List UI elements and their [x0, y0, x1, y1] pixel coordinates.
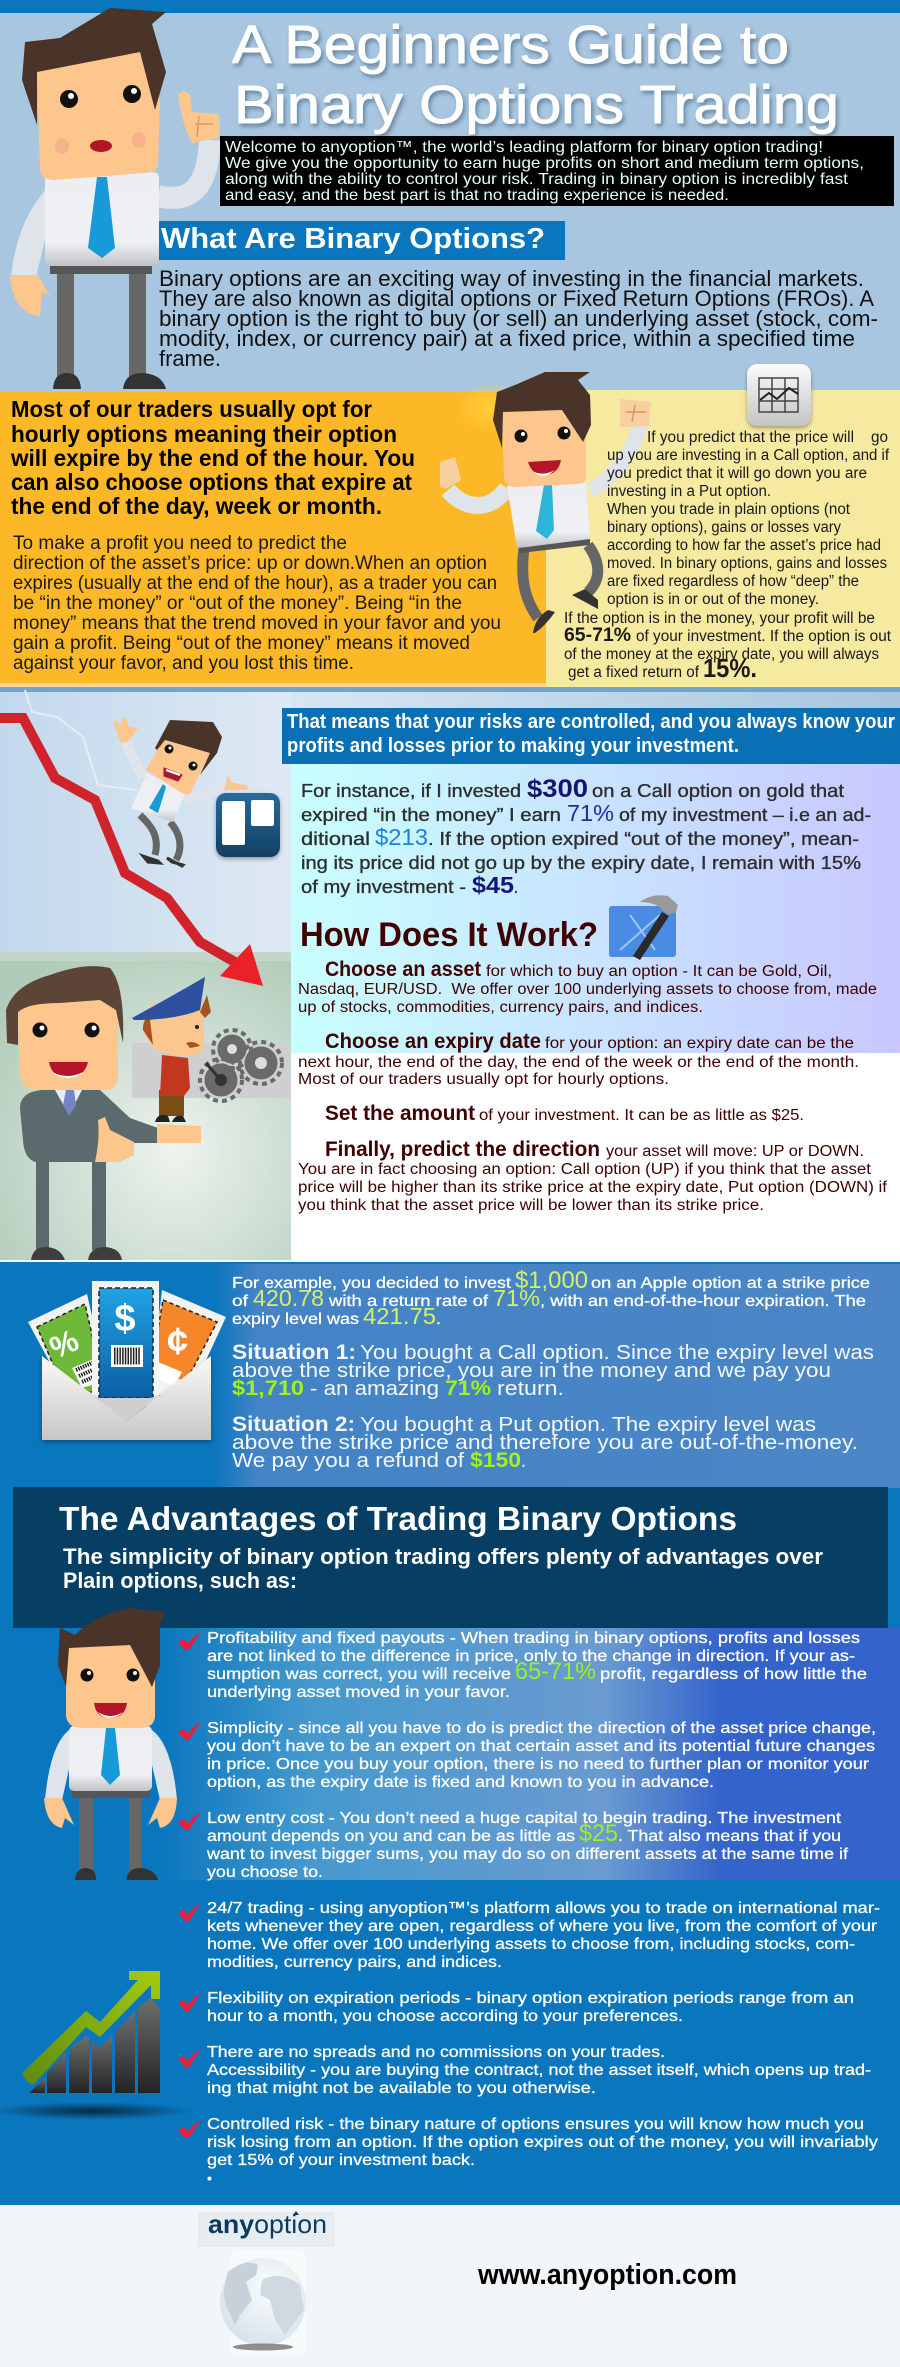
text: hourly options heading: [10, 396, 415, 519]
text: situations 1 and 2: $1,710: [232, 1377, 304, 1400]
text: situations 1 and 2: $150: [470, 1449, 521, 1472]
panel: advantages header: The Advantages of Trading Binary Options: [59, 1500, 737, 1537]
text: investment example: $300: [527, 775, 588, 803]
text: website url: www.anyoption.com: [477, 2259, 737, 2291]
text: how it works steps: up of stocks, commodities, currency pairs, and indices.: [298, 999, 703, 1016]
title: [232, 15, 839, 135]
text: call and put options: are fixed regardless of how “deep” the: [607, 573, 859, 590]
text: call and put options: investing in a Put option.: [607, 483, 771, 500]
text: how it works steps: Choose an asset: [325, 958, 481, 981]
text: worked example: on an Apple option at a strike price: [591, 1275, 870, 1292]
icon: stock chart button: [747, 364, 811, 426]
text: how it works steps: for which to buy an option - It can be Gold, Oil,: [486, 963, 832, 980]
panel: advantages gradient background: [160, 1628, 900, 1880]
text: advantages list: profit, regardless of how little the: [600, 1666, 867, 1683]
text: situations 1 and 2: above the strike price and therefore you are out-of-the-money.: [232, 1432, 858, 1454]
text: hourly options heading: Most of our traders usually opt for: [11, 396, 372, 422]
text: investment example: .: [514, 877, 518, 897]
text: how it works steps: Nasdaq, EUR/USD. We offer over 100 underlying assets to choose from, made: [298, 981, 877, 998]
text: worked example: [232, 1267, 870, 1329]
text: investment example: $45: [472, 872, 514, 898]
icon: coupons in envelope: ¢: [167, 1321, 188, 1363]
black intro box: and easy, and the best part is that no trading experience is needed.: [225, 187, 729, 204]
text: situations 1 and 2: return.: [497, 1378, 564, 1400]
text: advantages list: sumption was correct, you will receive: [207, 1666, 511, 1683]
panel: advantages header: Plain options, such as:: [63, 1568, 297, 1593]
text: advantages list: 65-71%: [515, 1658, 596, 1685]
text: worked example: 421.75: [363, 1303, 436, 1329]
text: advantages list: 24/7 trading - using anyoption™’s platform allows you to trade on international mar-: [207, 1900, 880, 1917]
icon: coupons in envelope: $: [114, 1298, 136, 1340]
text: advantages list: Low entry cost - You don’t need a huge capital to begin trading. The investment: [207, 1810, 842, 1827]
text: call and put options: moved. In binary options, gains and losses: [607, 555, 887, 572]
text: how it works steps: price will be higher than its strike price at the expiry date, Put option (DOWN) if: [298, 1179, 888, 1196]
top blue bar: [0, 0, 900, 13]
text: how to make a profit: [13, 533, 501, 674]
text: how it works steps: your asset will move: UP or DOWN.: [606, 1143, 864, 1160]
text: situations 1 and 2: You bought a Call option. Since the expiry level was: [360, 1342, 874, 1364]
arrow: falling red trend line: [0, 718, 263, 986]
text: advantages list: There are no spreads and no commissions on your trades.: [207, 2044, 665, 2061]
text: advantages list: $25: [579, 1820, 618, 1847]
panel: orange hourly options: [0, 382, 546, 688]
illustration: man pointing finger: [10, 8, 220, 389]
text: how to make a profit: expires (usually at the end of the hour), as a trader you can: [13, 573, 497, 594]
text: advantages list: underlying asset moved in your favor.: [207, 1684, 510, 1701]
text: advantages list: Simplicity - since all you have to do is predict the direction of the asset price change,: [207, 1720, 876, 1737]
icon: trello board: [216, 793, 280, 857]
text: call and put options: get a fixed return of: [568, 664, 700, 681]
divider strip: [0, 687, 900, 692]
panel: advantages header: [13, 1487, 888, 1628]
illustration: jumping man: [440, 372, 651, 633]
text: worked example: , with an end-of-the-hour expiration. The: [540, 1293, 866, 1310]
text: call and put options: you predict that it will go down you are: [607, 465, 867, 482]
text: hourly options heading: the end of the day, week or month.: [11, 493, 382, 519]
text: how to make a profit: To make a profit you need to predict the: [13, 533, 347, 554]
text: call and put options: 65-71%: [564, 625, 631, 646]
black intro box: Welcome to anyoption™, the world’s leading platform for binary option trading!: [225, 139, 823, 156]
panel: cyan to lavender background: [291, 764, 900, 1053]
panel: falling man background: [0, 692, 291, 952]
illustration: businessman in suit: [6, 966, 201, 1260]
text: investment example: of my investment -: [301, 877, 466, 897]
text: investment example: ditional: [301, 829, 370, 849]
text: binary options definition: [159, 266, 878, 371]
logo: anyoption: anyoption: [208, 2209, 327, 2239]
text: binary options definition: They are also known as digital options or Fixed Return Options (FROs). A: [159, 286, 874, 311]
text: worked example: with a return rate of: [328, 1293, 489, 1310]
illustration: globe: [220, 2250, 306, 2356]
text: advantages list: amount depends on you and can be as little as: [207, 1828, 575, 1845]
text: situations 1 and 2: above the strike price, you are in the money and we pay you: [232, 1360, 831, 1382]
text: situations 1 and 2: Situation 1:: [232, 1341, 356, 1364]
text: hourly options heading: hourly options meaning their option: [11, 421, 397, 447]
text: how to make a profit: against your favor, and you lost this time.: [13, 653, 354, 674]
text: call and put options: go: [871, 429, 888, 446]
text: advantages list: are not linked to the difference in price, only to the change in direction. If your as-: [207, 1648, 855, 1665]
text: worked example: of: [232, 1293, 249, 1310]
text: call and put options: [564, 429, 892, 683]
text: call and put options: If you predict that the price will: [647, 429, 854, 446]
text: advantages list: ing that might not be available to you otherwise.: [207, 2080, 596, 2097]
text: advantages list: in price. Once you buy your option, there is no need to further plan or monitor your: [207, 1756, 870, 1773]
text: investment example: on a Call option on gold that: [592, 781, 844, 801]
text: hourly options heading: will expire by the end of the hour. You: [10, 445, 415, 471]
text: situations 1 and 2: 71%: [445, 1377, 491, 1400]
illustration: white string: [25, 690, 137, 790]
text: how it works steps: of your investment. It can be as little as $25.: [479, 1107, 804, 1124]
logo: anyoption: [198, 2209, 335, 2247]
title: A Beginners Guide to: [232, 15, 789, 75]
panel: blue lower background: [0, 1262, 900, 2205]
text: investment example: ing its price did not go up by the expiry date, I remain with 15%: [301, 853, 861, 873]
text: call and put options: of your investment. If the option is out: [636, 628, 892, 645]
text: binary options definition: modity, index, or currency pair) at a fixed price, within a specified time: [159, 326, 855, 351]
black intro box: [220, 136, 894, 206]
heading: How Does It Work?: How Does It Work?: [300, 916, 598, 954]
text: advantages list: hour to a month, you choose according to your preferences.: [207, 2008, 683, 2025]
panel: introduction background: [0, 13, 900, 393]
text: advantages list: Controlled risk - the binary nature of options ensures you will know how much you: [207, 2116, 864, 2133]
text: advantages list: kets whenever they are open, regardless of where you live, from the comfort of your: [207, 1918, 878, 1935]
text: advantages list: . That also means that if you: [618, 1828, 841, 1845]
text: advantages list: [206, 1630, 880, 2186]
text: situations 1 and 2: Situation 2:: [232, 1413, 355, 1436]
panel: top strip of risk section: [291, 692, 900, 708]
text: how it works steps: for your option: an expiry date can be the: [545, 1035, 854, 1052]
panel: white how it works background: [291, 1053, 900, 1262]
text: situations 1 and 2: .: [521, 1450, 526, 1472]
text: how it works steps: You are in fact choosing an option: Call option (UP) if you think that the asset: [298, 1161, 872, 1178]
text: call and put options: up you are investing in a Call option, and if: [607, 447, 890, 464]
text: worked example: For example, you decided to invest: [232, 1275, 512, 1292]
text: advantages list: you choose to.: [207, 1864, 323, 1881]
chart: rising bars with green arrow: [0, 1971, 192, 2120]
icon: red check marks: [178, 1632, 201, 2138]
text: situations 1 and 2: You bought a Put option. The expiry level was: [360, 1414, 816, 1436]
text: advantages list: you don’t have to be an expert on that certain asset and its potential future changes: [207, 1738, 875, 1755]
text: worked example: .: [436, 1311, 441, 1328]
text: investment example: 71%: [567, 800, 614, 826]
text: advantages list: Flexibility on expiration periods - binary option expiration periods range from an: [207, 1990, 854, 2007]
text: call and put options: 15%.: [703, 653, 757, 683]
text: advantages list: option, as the expiry date is fixed and known to you in advance.: [207, 1774, 714, 1791]
heading: What Are Binary Options?: What Are Binary Options?: [161, 223, 545, 255]
text: binary options definition: binary option is the right to buy (or sell) an underlying asset (stock, com-: [159, 306, 878, 331]
text: advantages list: home. We offer over 100 underlying assets to choose from, including stocks, com-: [207, 1936, 855, 1953]
text: worked example: 420.78: [253, 1285, 324, 1311]
black intro box: along with the ability to control your risk. Trading in binary option is incredibly fast: [225, 171, 849, 188]
icon: coupons in envelope: [28, 1281, 226, 1440]
text: situations 1 and 2: [232, 1341, 874, 1472]
text: situations 1 and 2: - an amazing: [310, 1378, 439, 1400]
panel: advantages header: The simplicity of binary option trading offers plenty of advantages over: [63, 1544, 823, 1569]
text: advantages list: Profitability and fixed payouts - When trading in binary options, profits and losses: [207, 1630, 860, 1647]
text: call and put options: When you trade in plain options (not: [607, 501, 851, 518]
text: call and put options: according to how far the asset’s price had: [607, 537, 881, 554]
text: call and put options: binary options), gains or losses vary: [607, 519, 841, 536]
text: worked example: $1,000: [515, 1267, 588, 1294]
panel: example background: [215, 1264, 900, 1488]
illustration: small conductor with gears: [132, 977, 282, 1122]
text: worked example: 71%: [493, 1285, 540, 1311]
text: how to make a profit: money” means that the trend moved in your favor and you: [13, 613, 501, 634]
text: call and put options: of the money at the expiry date, you will always: [564, 646, 879, 663]
title: Binary Options Trading: [234, 75, 839, 135]
text: call and put options: If the option is in the money, your profit will be: [564, 610, 875, 627]
icon: hammer and blueprint: [609, 895, 678, 960]
text: how it works steps: you think that the asset price will be lower than its strike price.: [298, 1197, 764, 1214]
panel: green lower left: [0, 952, 291, 1260]
callout: risks are controlled: [282, 708, 900, 764]
text: investment example: For instance, if I invested: [301, 781, 521, 801]
icon: coupons in envelope: %: [44, 1322, 84, 1366]
text: how to make a profit: direction of the asset’s price: up or down.When an option: [13, 553, 487, 574]
text: investment example: . If the option expired “out of the money”, mean-: [428, 829, 859, 849]
text: how it works steps: Choose an expiry date: [325, 1030, 541, 1053]
text: call and put options: option is in or out of the money.: [607, 591, 819, 608]
illustration: falling man: [113, 718, 248, 866]
text: binary options definition: Binary options are an exciting way of investing in the financial markets.: [159, 266, 864, 291]
panel: cream call and put explanation: [546, 390, 900, 688]
text: how to make a profit: be “in the money” or “out of the money”. Being “in the: [13, 593, 462, 614]
text: how it works steps: Most of our traders usually opt for hourly options.: [298, 1071, 669, 1088]
text: advantages list: risk losing from an option. If the option expires out of the money, you will invariably: [207, 2134, 878, 2151]
panel: footer background: [0, 2205, 900, 2367]
text: how to make a profit: gain a profit. Being “out of the money” means it moved: [13, 633, 470, 654]
text: advantages list: get 15% of your investment back.: [207, 2152, 475, 2169]
text: investment example: $213: [375, 824, 428, 850]
text: advantages list: modities, currency pairs, and indices.: [207, 1954, 502, 1971]
text: investment example: expired “in the money” I earn: [301, 805, 561, 825]
illustration: standing smiling man: [44, 1608, 177, 1880]
text: advantages list: •: [207, 2170, 212, 2186]
text: investment example: of my investment – i.e an ad-: [619, 805, 871, 825]
text: advantages list: want to invest bigger sums, you may do so on different assets at the same time if: [206, 1846, 849, 1863]
callout: risks are controlled: profits and losses prior to making your investment.: [287, 734, 739, 757]
text: investment example: [301, 775, 871, 898]
text: how it works steps: [298, 958, 888, 1214]
text: how it works steps: Set the amount: [325, 1102, 475, 1125]
text: advantages list: Accessibility - you are buying the contract, not the asset itself, which opens up trad-: [207, 2062, 871, 2079]
text: situations 1 and 2: We pay you a refund of: [232, 1450, 464, 1472]
text: how it works steps: Finally, predict the direction: [325, 1138, 600, 1161]
text: hourly options heading: can also choose options that expire at: [11, 469, 412, 495]
text: worked example: expiry level was: [232, 1311, 359, 1328]
black intro box: We give you the opportunity to earn huge profits on short and medium term options,: [225, 155, 864, 172]
text: binary options definition: frame.: [159, 346, 221, 371]
text: how it works steps: next hour, the end of the day, the end of the week or the end of the month.: [298, 1054, 859, 1071]
